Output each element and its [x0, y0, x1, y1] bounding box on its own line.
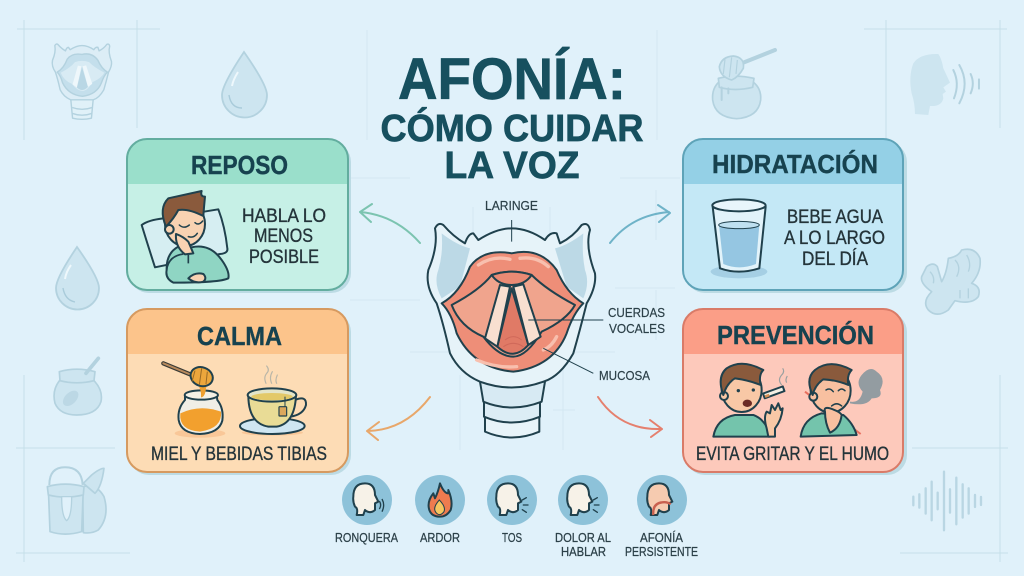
heading: calma: CALMA — [197, 321, 282, 351]
background icon: water drop — [222, 52, 267, 118]
text: miel y bebidas tibias: MIEL Y BEBIDAS TIBIAS — [151, 444, 327, 465]
text: bebe agua a lo largo del día: A LO LARGO — [784, 228, 885, 249]
panel: prevención — [683, 309, 907, 475]
central larynx diagram — [428, 220, 603, 437]
illustration: cup of tea — [240, 366, 306, 436]
background icon: speaking head — [910, 54, 979, 115]
heading: prevención: PREVENCIÓN — [717, 320, 874, 350]
arrow: to reposo — [360, 204, 420, 243]
arrow: to prevención — [598, 397, 662, 437]
title: AFONÍA: — [398, 47, 626, 112]
text: evita gritar y el humo: EVITA GRITAR Y EL HUMO — [696, 444, 889, 465]
text: habla lo menos posible: POSIBLE — [249, 247, 319, 268]
illustration: honey jar and dipper — [163, 363, 225, 438]
panel: reposo — [127, 139, 351, 293]
text: bebe agua a lo largo del día: BEBE AGUA — [787, 207, 883, 228]
label: cuerdas vocales: CUERDAS — [608, 306, 665, 320]
arrow: to calma — [367, 397, 430, 440]
text: habla lo menos posible — [242, 206, 326, 268]
panel: calma — [127, 309, 351, 475]
panel: hidratación — [683, 139, 907, 293]
title — [380, 47, 644, 187]
symptom: tos — [487, 475, 537, 545]
symptom: afonía persistente — [625, 475, 698, 559]
label: cuerdas vocales — [608, 306, 665, 336]
illustration: sleeping boy — [142, 191, 229, 283]
heading: hidratación: HIDRATACIÓN — [712, 149, 878, 179]
label: mucosa: MUCOSA — [599, 369, 651, 383]
title: CÓMO CUIDAR — [380, 106, 644, 150]
illustration: boy shouting and cigarette — [713, 364, 787, 437]
background icon: water drop left — [56, 247, 99, 309]
background icon: ginger root — [921, 249, 980, 314]
text: habla lo menos posible: HABLA LO — [242, 206, 326, 227]
symptoms row — [335, 475, 698, 559]
text: bebe agua a lo largo del día — [784, 207, 885, 270]
symptom: afonía persistente: PERSISTENTE — [625, 544, 698, 559]
illustration: glass of water — [711, 199, 767, 278]
background icon: bucket and ginger — [47, 467, 106, 534]
background icon: sound wave — [913, 472, 981, 530]
heading: reposo: REPOSO — [191, 150, 288, 180]
label: laringe: LARINGE — [485, 199, 538, 213]
symptom: dolor al hablar: HABLAR — [561, 544, 606, 559]
symptom: ronquera — [335, 475, 398, 545]
symptom: tos: TOS — [502, 530, 522, 545]
text: habla lo menos posible: MENOS — [254, 226, 313, 247]
background icon: honey jar left — [54, 358, 101, 415]
symptom: ardor: ARDOR — [420, 530, 460, 545]
background icon: honey pot with dipper — [713, 50, 775, 119]
arrow: to hidratación — [610, 205, 670, 243]
text: bebe agua a lo largo del día: DEL DÍA — [802, 249, 868, 270]
title: LA VOZ — [444, 145, 580, 187]
illustration: boy coughing with smoke — [801, 364, 883, 437]
symptom: dolor al hablar: DOLOR AL — [555, 530, 611, 545]
symptom: ronquera: RONQUERA — [335, 530, 398, 545]
symptom: ardor — [415, 475, 465, 545]
background icon: small larynx — [52, 44, 112, 119]
label: cuerdas vocales: VOCALES — [609, 322, 665, 336]
symptom: dolor al hablar — [555, 475, 611, 559]
symptom: afonía persistente: AFONÍA — [640, 530, 683, 545]
